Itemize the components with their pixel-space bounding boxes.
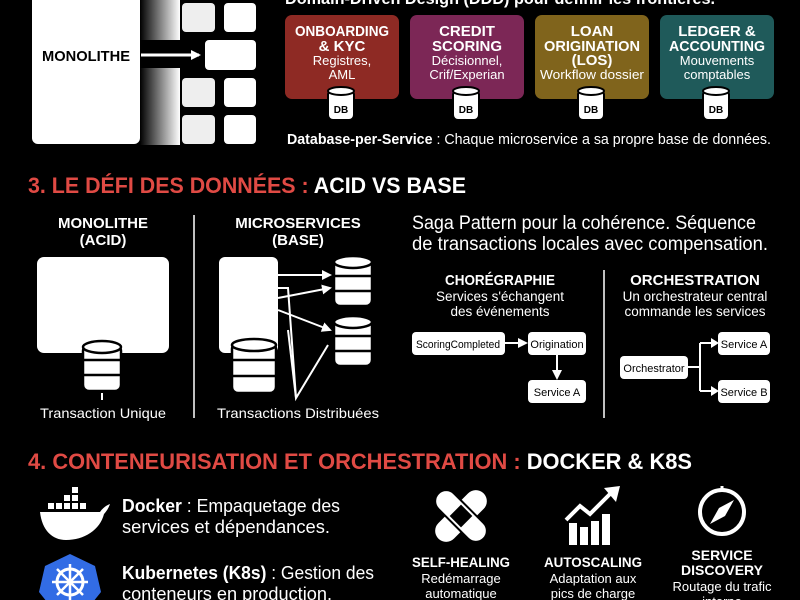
monolith decomposition diagram (32, 0, 256, 145)
monolith decomposition diagram: MONOLITHE (42, 48, 130, 65)
docker text: Docker : Empaquetage des (122, 496, 340, 516)
panel: microservices BASE (217, 215, 379, 421)
icon: docker whale (40, 487, 110, 540)
panel: monolithe ACID (37, 215, 169, 421)
saga pattern text: de transactions locales avec compensation. (412, 234, 768, 255)
service cards: (LOS) (572, 52, 612, 69)
service cards: DB (709, 105, 723, 116)
panel: microservices BASE: (BASE) (272, 232, 324, 249)
service cards: Registres, (313, 53, 371, 68)
panel: choregraphie: ScoringCompleted (416, 339, 500, 351)
service cards: DB (459, 105, 473, 116)
service cards: DB (584, 105, 598, 116)
panel: microservices BASE: MICROSERVICES (235, 215, 361, 232)
service cards: ACCOUNTING (669, 38, 765, 55)
docker text (122, 496, 340, 537)
panel: choregraphie (412, 272, 586, 403)
panel: choregraphie: des événements (450, 304, 550, 319)
section 4 title: 4. CONTENEURISATION ET ORCHESTRATION : DOCKER & K8S (28, 449, 692, 474)
saga pattern text (412, 213, 768, 255)
service cards: Crif/Experian (429, 67, 505, 82)
service cards: & KYC (319, 38, 366, 55)
service cards: ORIGINATION (544, 38, 640, 55)
panel: choregraphie: Origination (530, 339, 584, 351)
panel: monolithe ACID: Transaction Unique (40, 405, 166, 421)
database-per-service note: Database-per-Service : Chaque microservice a sa propre base de données. (287, 131, 771, 148)
service cards: LOAN (571, 23, 613, 40)
docker text: services et dépendances. (122, 517, 330, 537)
DB icons (328, 87, 729, 120)
panel: choregraphie: CHORÉGRAPHIE (445, 272, 555, 289)
feature: self-healing: Redémarrage (421, 571, 501, 586)
panel: monolithe ACID: MONOLITHE (58, 215, 148, 232)
service cards: LEDGER & (678, 23, 756, 40)
kubernetes text (122, 563, 374, 600)
panel: orchestration: Service B (720, 387, 768, 399)
kubernetes text: Kubernetes (K8s) : Gestion des (122, 563, 374, 583)
icon: kubernetes (39, 554, 101, 600)
feature: service discovery: SERVICE (691, 547, 753, 563)
panel: orchestration: Service A (721, 339, 768, 351)
service cards (285, 15, 774, 120)
service cards: CREDIT (439, 23, 495, 40)
panel: choregraphie: Services s'échangent (436, 289, 564, 304)
panel: orchestration: Orchestrator (623, 363, 685, 375)
service cards: DB (334, 105, 348, 116)
section 3 title: 3. LE DÉFI DES DONNÉES : ACID VS BASE (28, 173, 466, 198)
feature: autoscaling: AUTOSCALING (544, 554, 642, 570)
panel: orchestration (620, 272, 770, 403)
feature: autoscaling: Adaptation aux (550, 571, 637, 586)
service cards: ONBOARDING (295, 23, 389, 40)
service cards: Mouvements (680, 53, 755, 68)
feature: self-healing: SELF-HEALING (412, 554, 510, 570)
service cards: AML (329, 67, 355, 82)
service cards: Décisionnel, (432, 53, 502, 68)
panel: monolithe ACID: (ACID) (80, 232, 126, 249)
feature: self-healing (412, 486, 510, 600)
panel: choregraphie: Service A (534, 387, 581, 399)
feature: service discovery: DISCOVERY (681, 562, 764, 578)
saga pattern text: Saga Pattern pour la cohérence. Séquence (412, 213, 756, 234)
service cards: comptables (684, 67, 751, 82)
service cards: Workflow dossier (540, 67, 645, 82)
panel: orchestration: commande les services (624, 304, 766, 319)
panel: orchestration: Un orchestrateur central (623, 289, 767, 304)
feature: service discovery (672, 486, 772, 600)
panel: microservices BASE: Transactions Distribuées (217, 405, 379, 421)
service cards: SCORING (432, 38, 502, 55)
panel: orchestration: ORCHESTRATION (630, 272, 760, 289)
feature: service discovery: Routage du trafic (672, 579, 772, 594)
feature: autoscaling (544, 486, 642, 600)
